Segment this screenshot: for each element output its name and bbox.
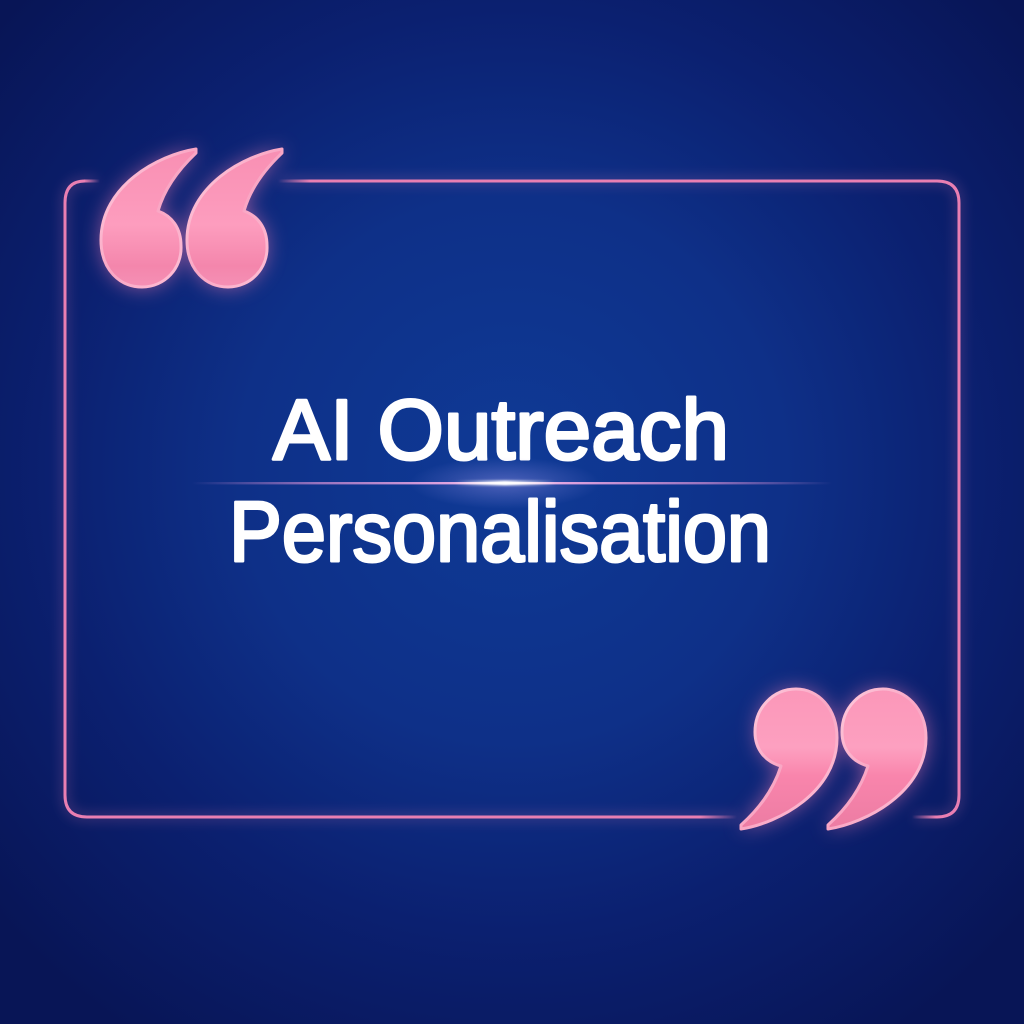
title: first line: AI Outreach (273, 383, 729, 478)
right closing mark (828, 689, 926, 829)
title: second line: Personalisation (229, 485, 771, 580)
icon: closing quotation marks (741, 689, 927, 829)
left opening mark (101, 149, 196, 287)
divider with central flare (192, 457, 832, 509)
left closing mark (741, 689, 837, 829)
icon: opening quotation marks (101, 149, 283, 288)
panel: rounded quote frame (65, 181, 959, 817)
right opening mark (187, 149, 282, 287)
